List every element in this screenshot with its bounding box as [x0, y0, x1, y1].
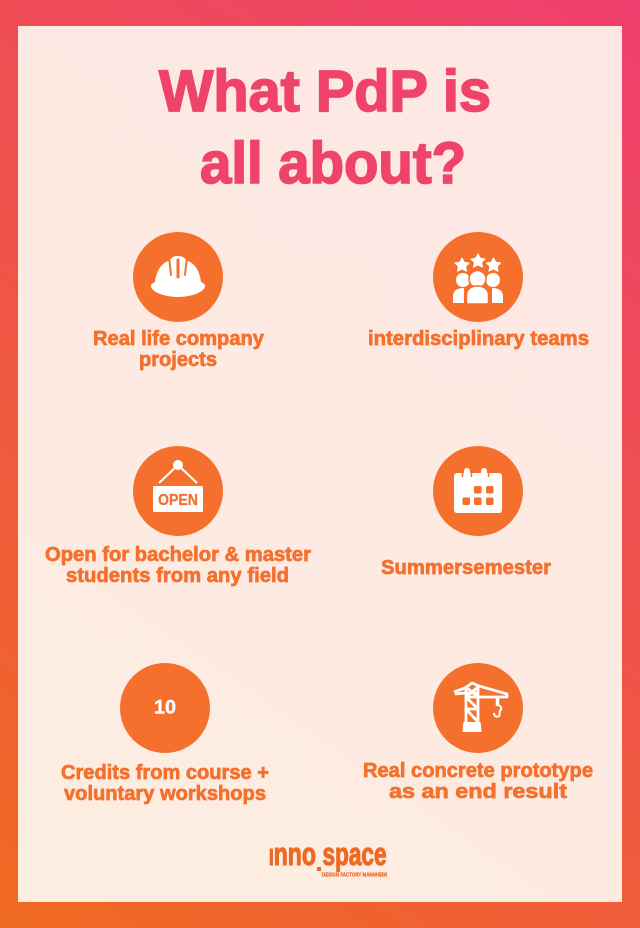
label: as an end result [389, 781, 567, 803]
title [159, 59, 491, 196]
item: credits [61, 663, 269, 805]
label [61, 762, 269, 805]
label [363, 760, 593, 803]
icon: calendar [433, 446, 523, 536]
logo: inno.space: Inno [269, 836, 316, 872]
label: interdisciplinary teams [368, 328, 589, 350]
item: interdisciplinary teams [368, 232, 589, 350]
icon: open sign: OPEN [158, 492, 198, 509]
item: real concrete prototype [363, 663, 593, 803]
icon: hard hat [133, 232, 223, 322]
label: students from any field [66, 565, 289, 587]
title: all about? [200, 131, 466, 196]
label: Real concrete prototype [363, 760, 593, 782]
label: Summersemester [381, 557, 551, 579]
item: open for bachelor and master students [45, 446, 311, 587]
label: voluntary workshops [64, 783, 266, 805]
label: Real life company [93, 328, 265, 350]
logo: inno.space [269, 836, 387, 878]
label [45, 544, 311, 587]
icon: team with stars [433, 232, 523, 322]
label: Credits from course + [61, 762, 269, 784]
item: real life company projects [93, 232, 265, 371]
logo: inno.space: DESIGN FACTORY MANNHEIM [322, 872, 387, 878]
label: Open for bachelor & master [45, 544, 311, 566]
badge: 10 credits [120, 663, 210, 753]
title: What PdP is [159, 59, 491, 124]
icon: open sign [133, 446, 223, 536]
label [93, 328, 265, 371]
item: summersemester [381, 446, 551, 579]
label: projects [139, 349, 217, 371]
logo: inno.space: space [322, 836, 386, 872]
icon: crane [433, 663, 523, 753]
badge: 10 credits: 10 [154, 698, 176, 718]
